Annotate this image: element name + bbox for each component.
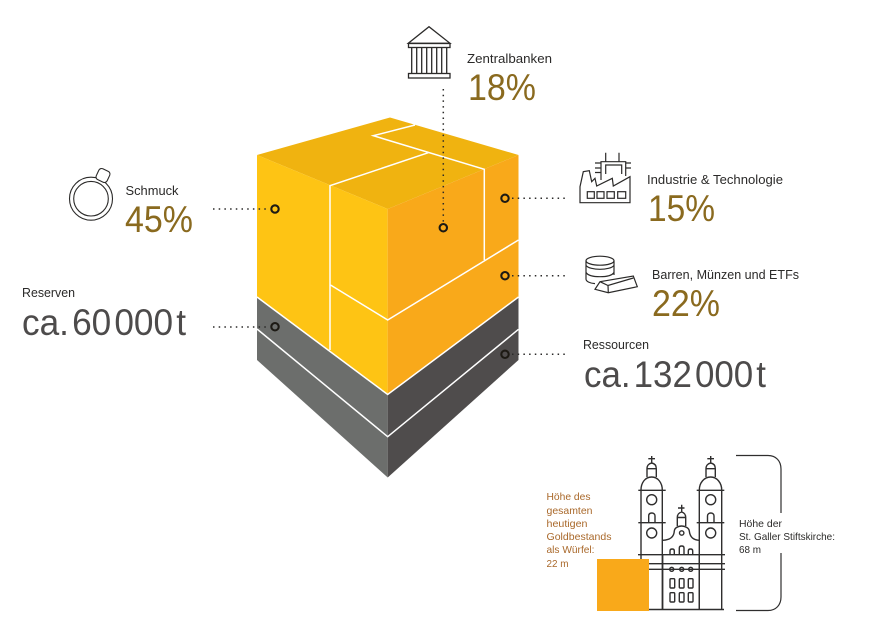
icon: ring [70, 168, 112, 220]
callout: Zentralbanken [408, 27, 552, 231]
cube left grey face [257, 297, 388, 478]
callout: Ressourcen [501, 337, 767, 395]
gold and resources cube [257, 118, 518, 478]
cube left gold face [257, 155, 388, 394]
label: Industrie & Technologie [647, 172, 783, 187]
caption: church height: St. Galler Stiftskirche: [739, 531, 835, 543]
icon: bank building [408, 27, 450, 78]
leader line [512, 197, 568, 199]
label: Zentralbanken [467, 51, 552, 66]
value: 18% [468, 67, 536, 108]
marker [440, 224, 447, 231]
value: 22% [652, 283, 720, 324]
leader line [512, 275, 568, 277]
leader line [442, 89, 444, 222]
value: 45% [125, 199, 193, 240]
caption: gold cube height: als Würfel: [546, 544, 594, 556]
cube right grey face [388, 297, 518, 478]
cube right gold face [388, 155, 518, 394]
caption: church height [739, 518, 835, 556]
value: 15% [648, 188, 715, 229]
callout: Schmuck [70, 168, 279, 240]
label: Ressourcen [583, 337, 649, 352]
label: Schmuck [126, 183, 179, 198]
caption: gold cube height: Höhe des [546, 491, 590, 503]
marker [501, 195, 509, 202]
caption: gold cube height: gesamten [546, 505, 593, 517]
caption: gold cube height: heutigen [546, 518, 588, 530]
caption: church height: Höhe der [739, 518, 782, 530]
gold cube square [597, 559, 649, 611]
caption: church height: 68 m [739, 544, 761, 556]
caption: gold cube height: 22 m [546, 558, 569, 570]
cube top face [257, 118, 518, 209]
label: Barren, Münzen und ETFs [652, 267, 799, 282]
callout: Industrie und Technologie [501, 153, 783, 229]
marker [501, 351, 509, 358]
marker [271, 323, 279, 330]
icon: factory [580, 153, 631, 203]
callout: Reserven [22, 285, 279, 343]
leader line [213, 208, 270, 210]
callout: Barren, Muenzen und ETFs [501, 256, 799, 324]
marker [501, 272, 509, 279]
caption: gold cube height [546, 491, 612, 570]
size comparison: church and gold cube [546, 456, 835, 611]
icon: coins and gold bar [586, 256, 637, 293]
leader line [213, 326, 270, 328]
marker [271, 205, 279, 213]
cube dividing lines [257, 125, 518, 437]
value: ca. 132 000 t [584, 354, 767, 395]
value: ca. 60 000 t [22, 302, 187, 343]
bracket: church height [736, 456, 781, 610]
caption: gold cube height: Goldbestands [546, 531, 612, 543]
icon: St. Gallen abbey church [638, 456, 725, 610]
leader line [512, 353, 568, 355]
label: Reserven [22, 285, 75, 300]
